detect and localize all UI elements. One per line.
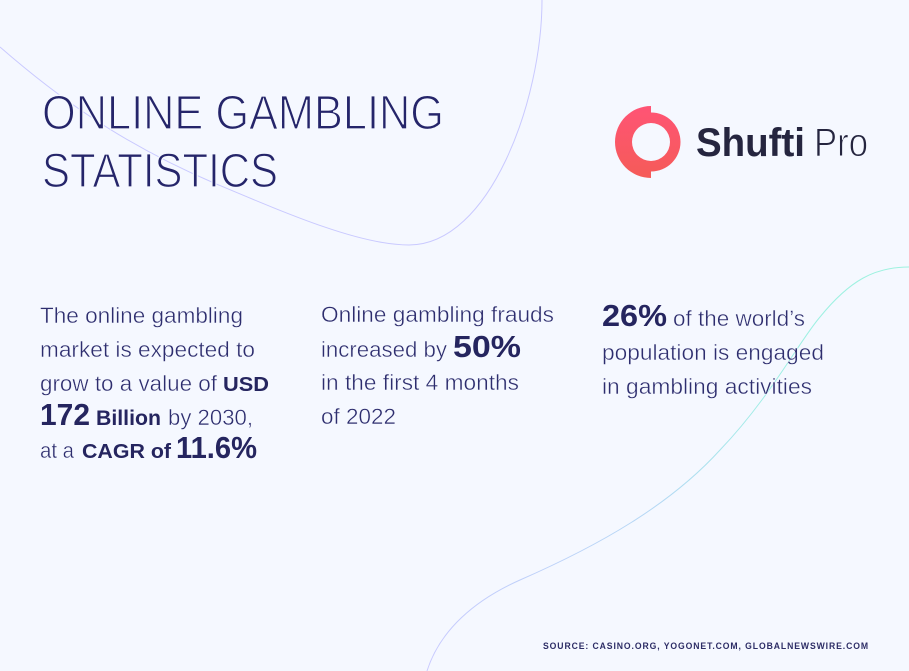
- source note: SOURCE: CASINO.ORG, YOGONET.COM, GLOBALNEWSWIRE.COM: [543, 641, 869, 652]
- text block: market value: by 2030,: [168, 405, 253, 430]
- text block: frauds: Online gambling frauds: [321, 302, 554, 327]
- text block: market value: at a: [40, 438, 75, 463]
- text block: market value: 11.6%: [176, 430, 257, 465]
- text block: frauds: of 2022: [321, 404, 396, 429]
- decorative curve: purple: [0, 0, 542, 245]
- wordmark: Shufti: [696, 121, 805, 165]
- title: ONLINE GAMBLING: [42, 87, 444, 140]
- text block: population: 26%: [602, 298, 667, 333]
- decorative curve: teal: [427, 267, 909, 671]
- text block: population: [602, 298, 824, 399]
- text block: market value: CAGR of: [82, 441, 171, 463]
- text block: market value: grow to a value of: [40, 371, 218, 396]
- text block: frauds: [321, 302, 554, 429]
- text block: market value: Billion: [96, 407, 161, 430]
- text block: market value: USD: [223, 374, 269, 396]
- logo: Shufti Pro: [615, 106, 868, 178]
- text block: population: population is engaged: [602, 340, 824, 365]
- logo: Shufti Pro: Pro: [814, 121, 868, 165]
- text block: population: in gambling activities: [602, 374, 812, 399]
- text block: population: of the world’s: [673, 306, 805, 331]
- text block: frauds: increased by: [321, 337, 447, 362]
- text block: market value: 172: [40, 397, 90, 432]
- title: [42, 87, 444, 198]
- text block: frauds: 50%: [453, 329, 521, 364]
- icon: ring: [615, 106, 680, 178]
- text block: market value: The online gambling: [40, 303, 243, 328]
- text block: frauds: in the first 4 months: [321, 370, 519, 395]
- text block: market value: [40, 303, 269, 465]
- text block: market value: market is expected to: [40, 337, 255, 362]
- title: STATISTICS: [42, 145, 278, 198]
